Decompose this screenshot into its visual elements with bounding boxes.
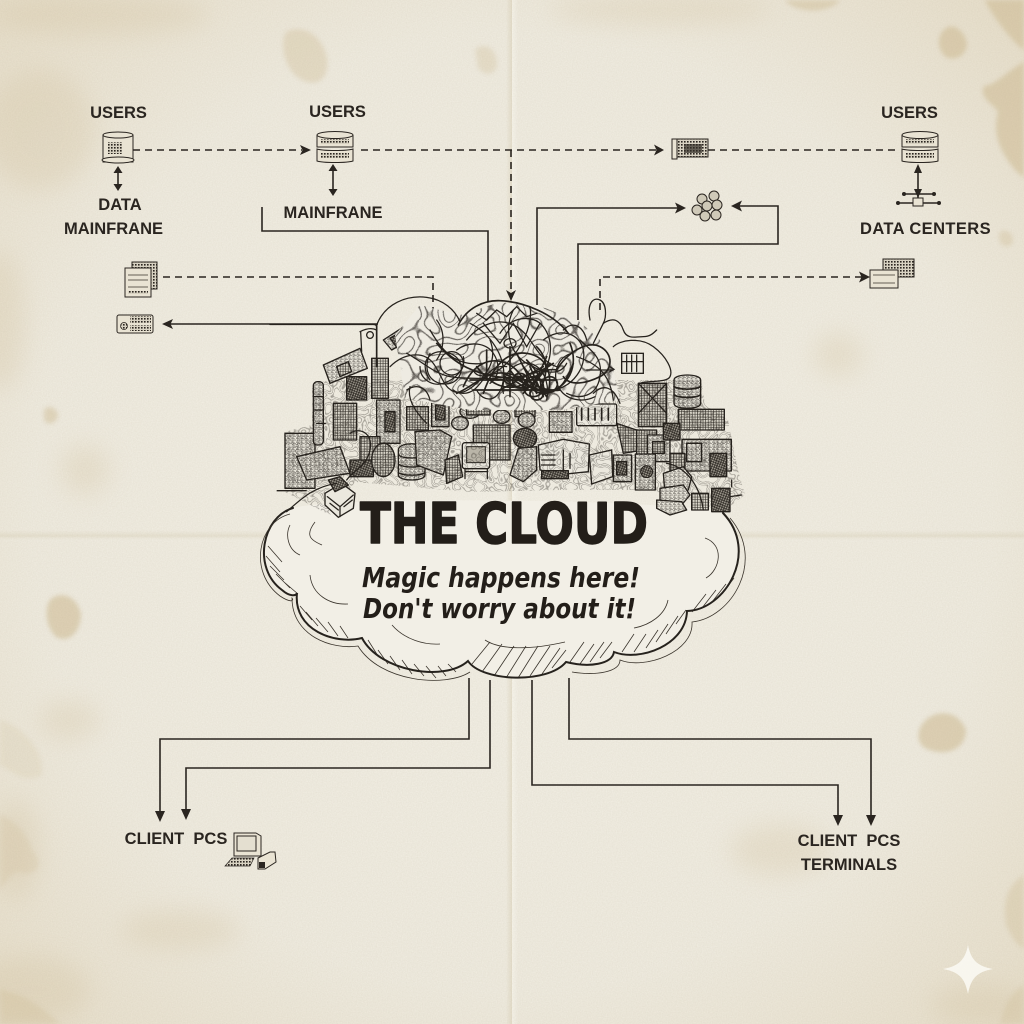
icon: network card [672, 139, 708, 159]
decorative sparkle [943, 945, 993, 994]
label: mainframe middle: MAINFRANE [284, 204, 382, 222]
icon: database right [902, 132, 938, 162]
label: client pcs and terminals right [798, 832, 900, 874]
connector: mainframe line into cloud [262, 207, 488, 302]
icon: double arrow middle [328, 164, 338, 196]
label: data mainframe: DATA [98, 196, 142, 214]
equipment: front left cube [325, 477, 355, 517]
connector: cloud to coin cluster [537, 202, 686, 305]
label: data mainframe: MAINFRANE [64, 220, 163, 238]
label: client pcs and terminals right: CLIENT PCS [798, 832, 900, 850]
connector: dashed from document stack into cloud [163, 277, 433, 335]
icon: desktop computer [225, 833, 276, 869]
icon: document stack [125, 262, 157, 297]
tagline: Magic happens here! [362, 561, 640, 594]
icon: network nodes with arrow [896, 164, 941, 206]
connector: terminals line one [532, 680, 843, 826]
icon: left mainframe cylinder [102, 132, 134, 163]
connector: users dashed to network card [361, 144, 664, 156]
fine ink texture over machines [280, 380, 750, 515]
equipment pile and tangled wires [270, 297, 750, 517]
connector: dashed drop into the cloud [506, 150, 516, 301]
connector: cloud to terminal box [162, 319, 378, 329]
connector: cloud loop to coin cluster [578, 200, 778, 320]
label: client pcs and terminals right: TERMINALS [801, 856, 897, 874]
icon: database middle [317, 132, 353, 162]
label: data mainframe [64, 196, 163, 238]
icon: double arrow left [114, 166, 122, 191]
label: users right: USERS [881, 104, 938, 122]
equipment: right machines [617, 353, 742, 512]
icon: right card stack [870, 259, 914, 288]
cloud body fill [264, 500, 739, 678]
equipment: left machines [277, 318, 449, 491]
connector: dashed to right card stack [600, 272, 870, 310]
cloud outline [260, 508, 745, 680]
label: data centers: DATA CENTERS [860, 220, 991, 238]
connector: users dashed to second users [133, 145, 311, 155]
connector: client line one [155, 678, 469, 822]
icon: terminal box [117, 315, 153, 333]
tangled wires [270, 297, 671, 480]
equipment: centre machines [398, 400, 632, 484]
label: users middle: USERS [309, 103, 366, 121]
fold lines [506, 0, 518, 1024]
cloud hatch shading [266, 546, 734, 678]
label: client pcs left: CLIENT PCS [125, 830, 227, 848]
icon: coin cluster [692, 191, 722, 221]
connector: network card dashed to right users [708, 149, 897, 151]
hatch shading around front machines [287, 463, 703, 512]
connector: client line two [181, 680, 490, 820]
tagline: Don't worry about it! [363, 592, 636, 625]
wire tangle texture [395, 302, 620, 410]
equipment: front right stack [657, 467, 708, 515]
connector: terminals line two [569, 678, 876, 826]
title: THE CLOUD [360, 492, 648, 557]
tagline [362, 561, 640, 625]
cloud line work [264, 508, 739, 678]
label: users left: USERS [90, 104, 147, 122]
